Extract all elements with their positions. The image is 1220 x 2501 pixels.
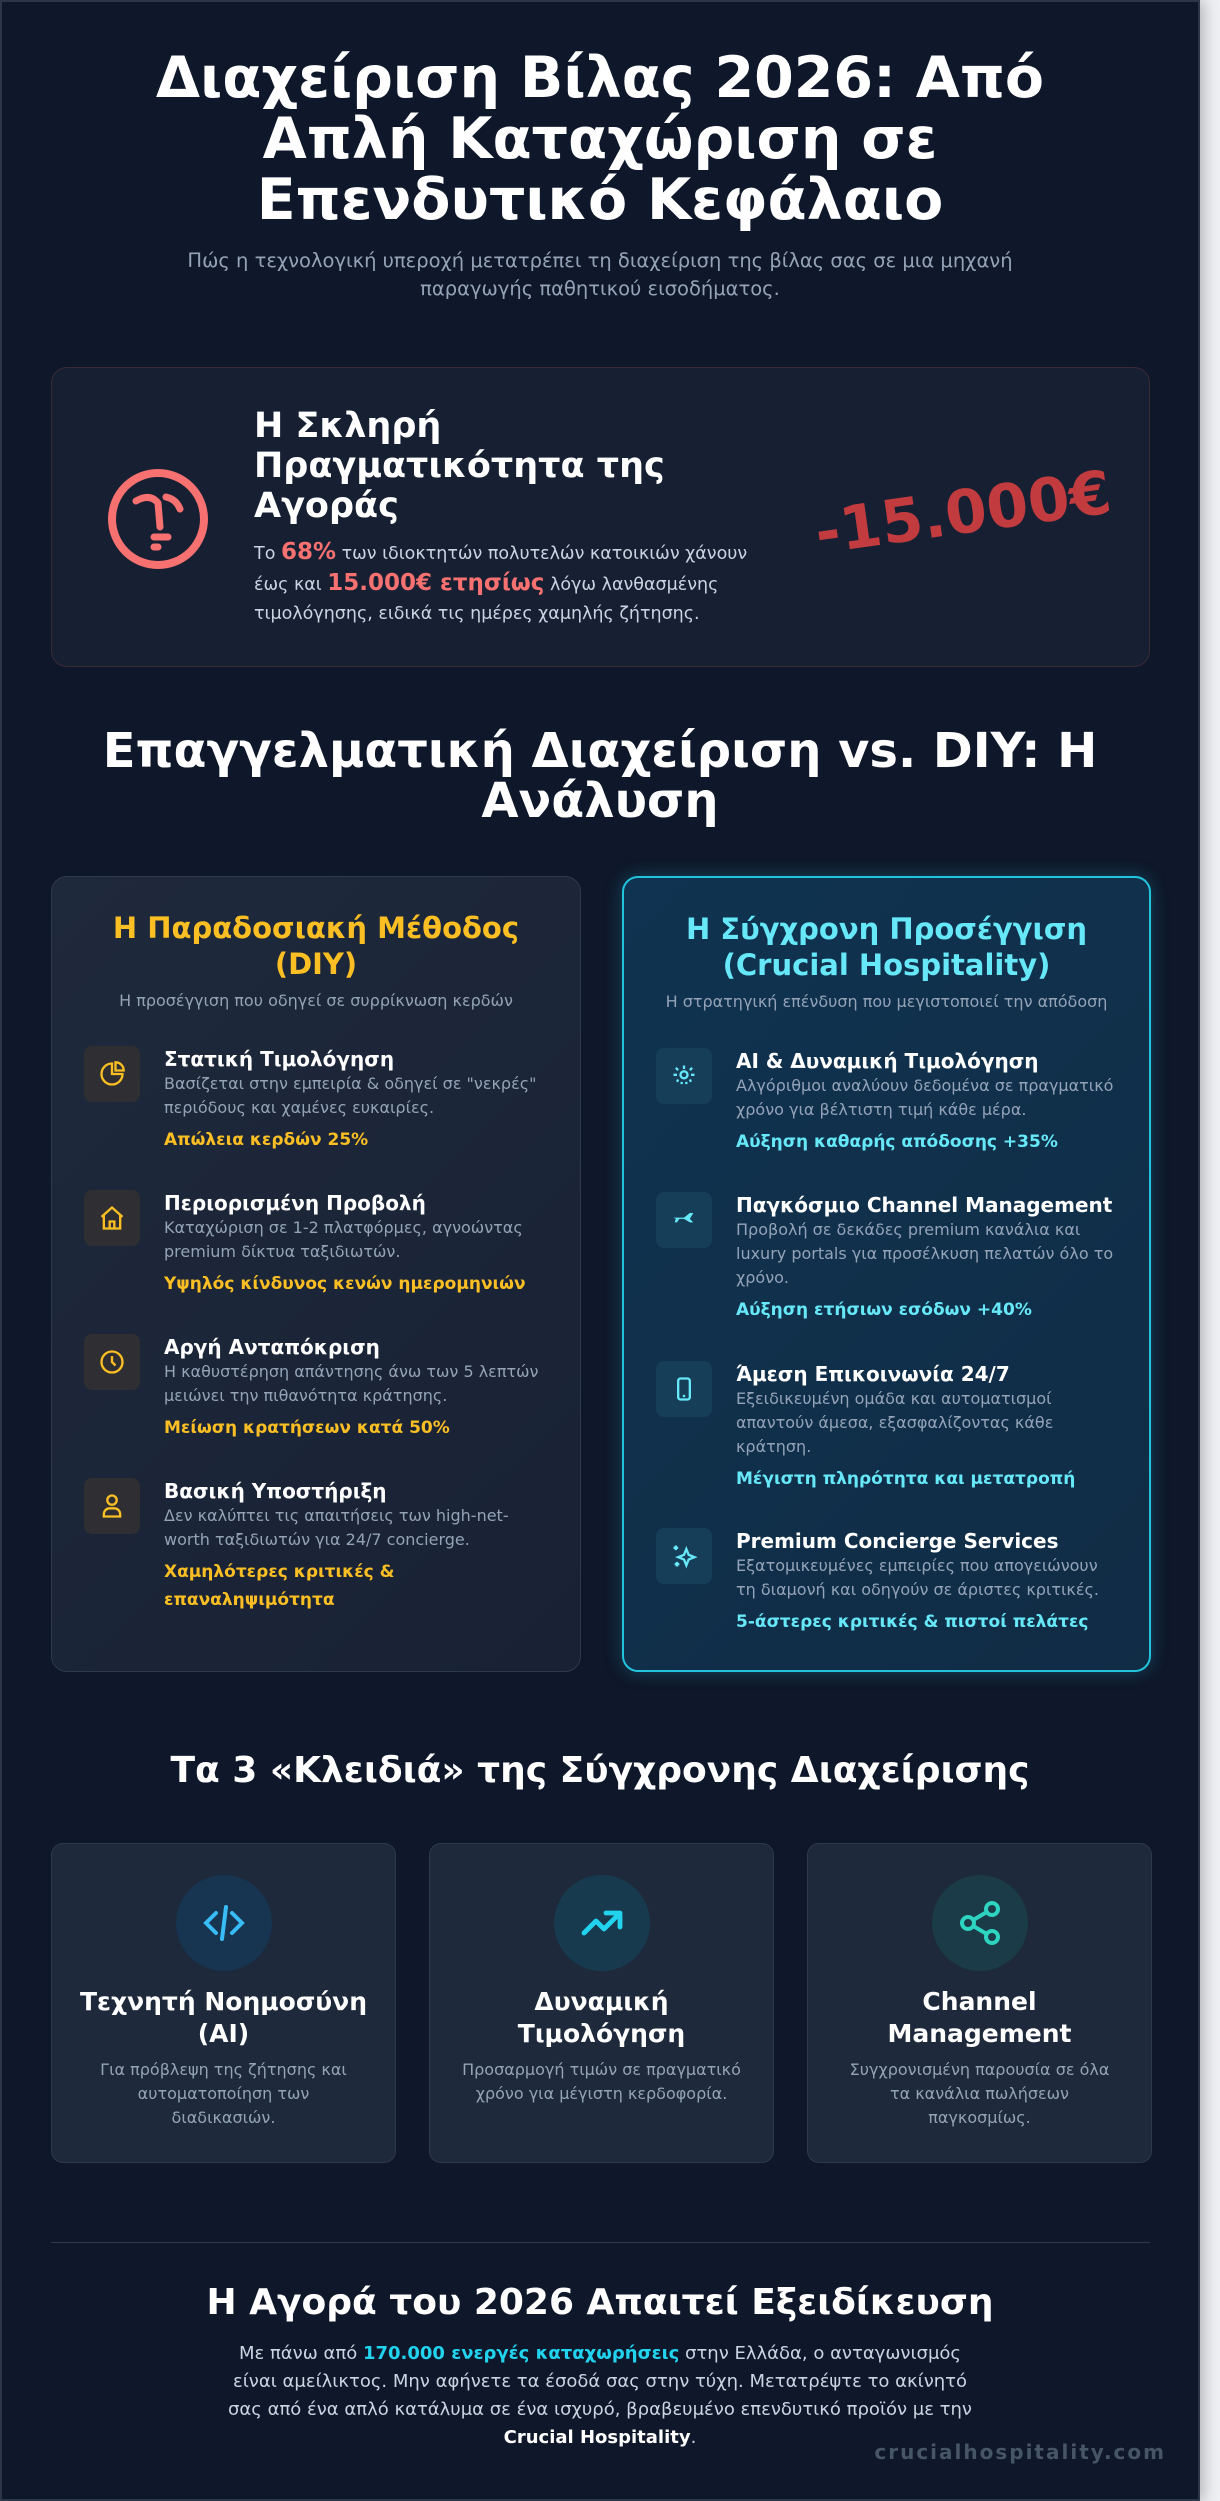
icon: clock [84, 1334, 140, 1390]
card: AI: Τεχνητή Νοημοσύνη (AI) [80, 1987, 367, 2048]
icon: share [932, 1875, 1028, 1971]
heading: Η Σκληρή Πραγματικότητα της Αγοράς [254, 406, 665, 526]
item: AI pricing: Αύξηση καθαρής απόδοσης +35% [736, 1132, 1058, 1152]
item: concierge [656, 1528, 1099, 1632]
item: instant communication: Άμεση Επικοινωνία 24/7 [736, 1362, 1010, 1386]
card: AI: Για πρόβλεψη της ζήτησης και αυτοματοποίηση των διαδικασιών. [100, 2060, 347, 2127]
item: slow response: Αργή Ανταπόκριση [164, 1335, 380, 1359]
item: AI pricing: Αλγόριθμοι αναλύουν δεδομένα σε πραγματικό χρόνο για βέλτιστη τιμή κάθε μέρα. [736, 1076, 1113, 1119]
item: limited exposure [84, 1190, 526, 1294]
item: concierge: 5-άστερες κριτικές & πιστοί πελάτες [736, 1612, 1088, 1632]
icon: code [176, 1875, 272, 1971]
item: channel management: Παγκόσμιο Channel Management [736, 1193, 1112, 1217]
panel: traditional DIY [51, 876, 581, 1672]
item: slow response: Μείωση κρατήσεων κατά 50% [164, 1418, 450, 1438]
item: instant communication [656, 1361, 1075, 1489]
item: static pricing: Απώλεια κερδών 25% [164, 1130, 368, 1150]
panel: modern approach [622, 876, 1151, 1672]
item: static pricing: Βασίζεται στην εμπειρία & οδηγεί σε "νεκρές" περιόδους και χαμένες ευκαιρίες. [164, 1074, 536, 1117]
card: dynamic pricing: Προσαρμογή τιμών σε πραγματικό χρόνο για μέγιστη κερδοφορία. [462, 2060, 741, 2103]
heading: Η Παραδοσιακή Μέθοδος (DIY) [113, 911, 519, 981]
section heading: 3 keys: Τα 3 «Κλειδιά» της Σύγχρονης Διαχείρισης [170, 1750, 1030, 1791]
item: limited exposure: Καταχώριση σε 1-2 πλατφόρμες, αγνοώντας premium δίκτυα ταξιδιωτών. [164, 1218, 523, 1261]
title: Διαχείριση Βίλας 2026: Από Απλή Καταχώριση σε Επενδυτικό Κεφάλαιο [156, 45, 1044, 233]
item: basic support: Δεν καλύπτει τις απαιτήσεις των high-net-worth ταξιδιωτών για 24/7 concierge. [164, 1506, 509, 1549]
subtitle: Πώς η τεχνολογική υπεροχή μετατρέπει τη διαχείριση της βίλας σας σε μια μηχανή παραγωγής παθητικού εισοδήματος. [187, 249, 1013, 300]
icon: sparkles [656, 1528, 712, 1584]
icon: warning clock [108, 469, 208, 569]
card: dynamic pricing [429, 1843, 774, 2163]
item: basic support: Χαμηλότερες κριτικές & επαναληψιμότητα [164, 1562, 394, 1610]
watermark: crucialhospitality.com [874, 2440, 1166, 2464]
item: limited exposure: Περιορισμένη Προβολή [164, 1191, 426, 1215]
item: concierge: Premium Concierge Services [736, 1529, 1059, 1553]
icon: trending up [554, 1875, 650, 1971]
item: AI pricing [656, 1048, 1113, 1152]
icon: plane [656, 1192, 712, 1248]
card: AI [51, 1843, 396, 2163]
icon: home [84, 1190, 140, 1246]
section heading: comparison: Επαγγελματική Διαχείριση vs. DIY: Η Ανάλυση [103, 723, 1097, 829]
item: instant communication: Μέγιστη πληρότητα και μετατροπή [736, 1469, 1075, 1489]
body text: Το 68% των ιδιοκτητών πολυτελών κατοικιών χάνουν έως και 15.000€ ετησίως λόγω λανθασμένης τιμολόγησης, ειδικά τις ημέρες χαμηλής ζήτησης. [254, 539, 747, 624]
item: instant communication: Εξειδικευμένη ομάδα και αυτοματισμοί απαντούν άμεσα, εξασφαλίζοντας κάθε κράτηση. [736, 1389, 1053, 1456]
subheading: Η προσέγγιση που οδηγεί σε συρρίκνωση κερδών [119, 991, 513, 1010]
item: channel management: Αύξηση ετήσιων εσόδων +40% [736, 1300, 1032, 1320]
card: channel management [807, 1843, 1152, 2163]
item: slow response: Η καθυστέρηση απάντησης άνω των 5 λεπτών μειώνει την πιθανότητα κράτησης. [164, 1362, 538, 1405]
item: slow response [84, 1334, 538, 1438]
icon: phone [656, 1361, 712, 1417]
item: static pricing: Στατική Τιμολόγηση [164, 1047, 394, 1071]
item: channel management: Προβολή σε δεκάδες premium κανάλια και luxury portals για προσέλκυση πελατών όλο το χρόνο. [736, 1220, 1113, 1287]
card: channel management: Channel Management [887, 1987, 1072, 2048]
icon: chip [656, 1048, 712, 1104]
heading: Η Σύγχρονη Προσέγγιση (Crucial Hospitality) [686, 912, 1087, 982]
card: dynamic pricing: Δυναμική Τιμολόγηση [518, 1987, 685, 2048]
closing paragraph: Με πάνω από 170.000 ενεργές καταχωρήσεις στην Ελλάδα, ο ανταγωνισμός είναι αμείλικτος. Μην αφήνετε τα έσοδά σας στην τύχη. Μετατρέψτε το ακίνητό σας από ένα απλό κατάλυμα σε ένα ισχυρό, βραβευμένο επενδυτικό προϊόν με την Crucial Hospitality. [228, 2343, 972, 2448]
item: basic support [84, 1478, 509, 1610]
card: channel management: Συγχρονισμένη παρουσία σε όλα τα κανάλια πωλήσεων παγκοσμίως. [850, 2060, 1109, 2127]
closing heading: Η Αγορά του 2026 Απαιτεί Εξειδίκευση [206, 2282, 994, 2323]
item: limited exposure: Υψηλός κίνδυνος κενών ημερομηνιών [164, 1274, 526, 1294]
icon: user [84, 1478, 140, 1534]
item: static pricing [84, 1046, 536, 1150]
item: channel management [656, 1192, 1113, 1320]
panel: market reality alert [51, 367, 1150, 667]
icon: pie chart [84, 1046, 140, 1102]
item: basic support: Βασική Υποστήριξη [164, 1479, 387, 1503]
item: AI pricing: AI & Δυναμική Τιμολόγηση [736, 1049, 1039, 1073]
big number: -15.000€ [811, 458, 1116, 568]
item: concierge: Εξατομικευμένες εμπειρίες που απογειώνουν τη διαμονή και οδηγούν σε άριστες κριτικές. [736, 1556, 1099, 1599]
subheading: Η στρατηγική επένδυση που μεγιστοποιεί την απόδοση [666, 992, 1107, 1011]
